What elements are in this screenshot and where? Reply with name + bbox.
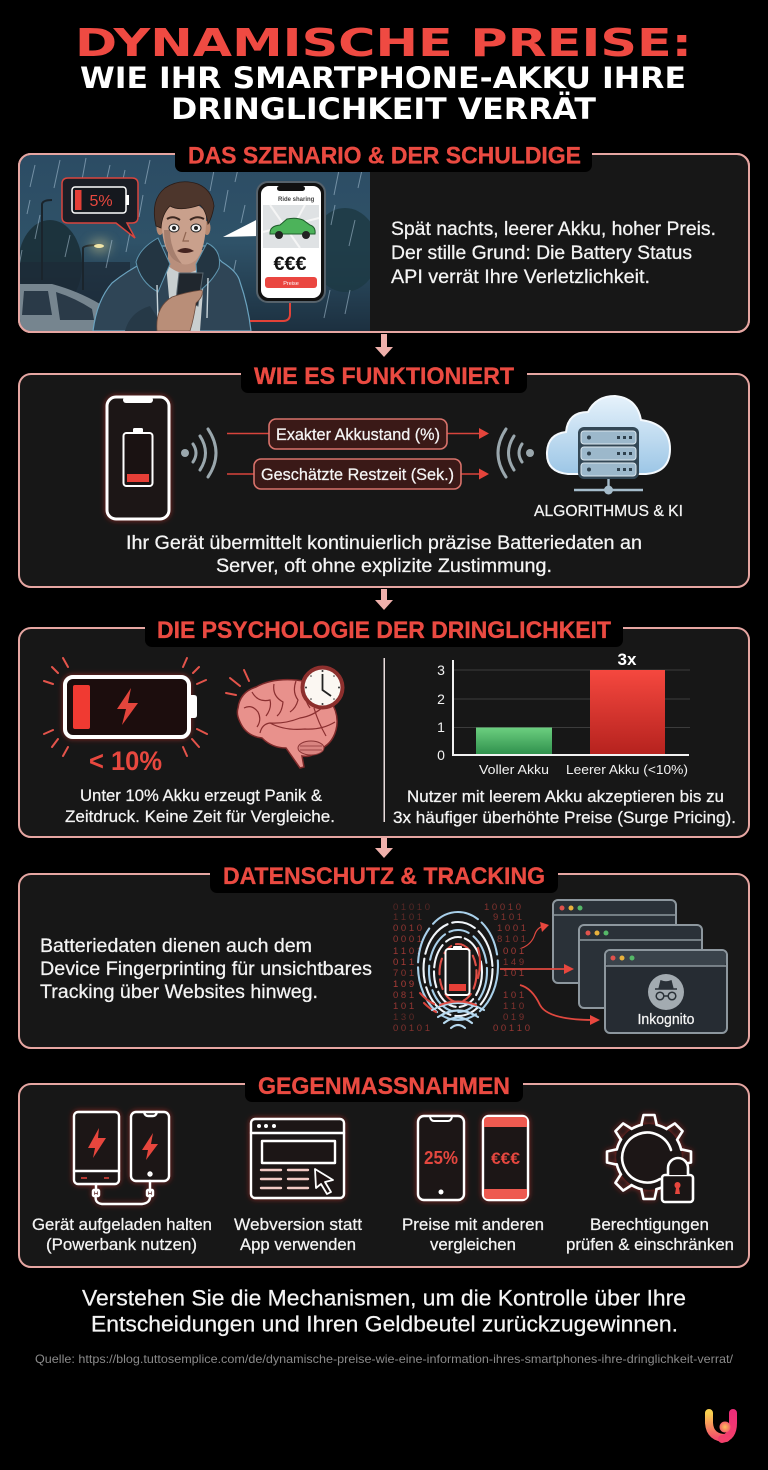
bar chart: Leerer Akku (<10%): [566, 762, 688, 777]
divider: [384, 658, 385, 822]
closing statement: Entscheidungen und Ihren Geldbeutel zurückzugewinnen.: [91, 1312, 678, 1336]
icon: signal waves from phone: [181, 429, 216, 477]
ride app phone: Ride sharing: [278, 197, 315, 203]
arrow: exact battery level: Exakter Akkustand (%): [276, 425, 440, 444]
logo: [709, 1413, 733, 1439]
labels: countermeasures: [32, 1216, 734, 1254]
binary code columns: 1 1 0 1: [393, 946, 422, 957]
binary code columns: 9 1 0 1: [493, 912, 522, 923]
icon: low battery with alarm rays: [44, 658, 207, 756]
icon: two phones comparing prices: €€€: [491, 1149, 521, 1168]
arrow: psychology to privacy: [375, 838, 393, 858]
battery speech bubble: [62, 178, 138, 238]
arrow: exact battery level: [227, 419, 489, 449]
text: panic: Zeitdruck. Keine Zeit für Vergleiche.: [65, 807, 335, 826]
labels: countermeasures: App verwenden: [240, 1236, 356, 1254]
heading: psychology: DIE PSYCHOLOGIE DER DRINGLICHKEIT: [157, 617, 611, 644]
heading: countermeasures: GEGENMASSNAHMEN: [258, 1073, 510, 1100]
hair: [154, 182, 214, 228]
panel: psychology: [19, 611, 749, 837]
illustration: man in rain with phone: [18, 155, 379, 331]
icon: power bank and phone: [74, 1112, 169, 1204]
binary code columns: 1 1 0 1: [393, 912, 422, 923]
icon: two phones comparing prices: [418, 1116, 528, 1200]
heading: how it works: WIE ES FUNKTIONIERT: [254, 363, 514, 390]
text: scenario: Spät nachts, leerer Akku, hoher Preis.: [391, 219, 716, 240]
binary code columns: 1 0 1: [503, 990, 524, 1001]
red cable: [250, 302, 290, 321]
text: surge pricing: [393, 787, 736, 827]
icon: browser with cursor: [251, 1119, 344, 1198]
panel: countermeasures: [19, 1067, 749, 1267]
text: scenario: Der stille Grund: Die Battery Status: [391, 243, 692, 264]
bar chart: 0: [437, 747, 445, 763]
binary code columns: 1 1 0: [503, 1001, 524, 1012]
heading: privacy: DATENSCHUTZ & TRACKING: [223, 863, 545, 890]
arrow: estimated remaining time: [227, 459, 489, 489]
binary code columns: 0 0 1: [503, 946, 524, 957]
title: [75, 21, 692, 126]
speech tail to app: [223, 220, 256, 237]
text: privacy: Batteriedaten dienen auch dem: [40, 936, 312, 957]
icon: signal waves to cloud: [498, 429, 534, 477]
icon: brain with clock: [226, 668, 342, 768]
car in background: [20, 284, 100, 331]
text: surge pricing: Nutzer mit leerem Akku akzeptieren bis zu: [407, 787, 724, 806]
closing statement: Verstehen Sie die Mechanismen, um die Kontrolle über Ihre: [82, 1286, 686, 1310]
head: [156, 224, 162, 235]
text: how it works: Server, oft ohne explizite Zustimmung.: [216, 556, 552, 577]
labels: countermeasures: prüfen & einschränken: [566, 1236, 734, 1254]
title: WIE IHR SMARTPHONE-AKKU IHRE: [80, 61, 686, 95]
arrow: scenario to function: [375, 334, 393, 357]
icon: cloud server: [547, 396, 670, 494]
handheld phone: [176, 273, 203, 306]
text: scenario: [391, 219, 716, 288]
binary code columns: 0 0 0 1: [393, 934, 422, 945]
ride app phone: [257, 182, 325, 302]
icon: gear with lock: [607, 1115, 693, 1202]
binary code columns: 0 1 1: [393, 957, 414, 968]
title: DRINGLICHKEIT VERRÄT: [171, 92, 596, 126]
text: surge pricing: 3x häufiger überhöhte Preise (Surge Pricing).: [393, 808, 736, 827]
bar chart: 3: [437, 662, 445, 678]
labels: countermeasures: Preise mit anderen: [402, 1216, 544, 1234]
closing statement: [82, 1286, 686, 1336]
panel: scenario: [18, 136, 749, 332]
labels: countermeasures: vergleichen: [430, 1236, 516, 1254]
labels: countermeasures: Berechtigungen: [590, 1216, 709, 1234]
text: privacy: Device Fingerprinting für unsichtbares: [40, 959, 372, 980]
battery speech bubble: 5%: [89, 193, 113, 210]
binary code columns: 7 0 1: [393, 968, 414, 979]
icon: fingerprint with battery: [418, 912, 498, 1028]
binary code columns: 0 1 9: [503, 1012, 524, 1023]
panel: how it works: [19, 357, 749, 587]
binary code columns: 0 0 1 0 1: [393, 1023, 430, 1034]
binary code columns: 1 3 0: [393, 1012, 414, 1023]
bar chart: 3x: [618, 650, 637, 669]
title: DYNAMISCHE PREISE:: [75, 21, 692, 66]
text: how it works: Ihr Gerät übermittelt kontinuierlich präzise Batteriedaten an: [126, 533, 642, 554]
binary code columns: 1 0 0 1 0: [484, 902, 521, 913]
binary code columns: 0 0 1 0: [393, 923, 422, 934]
icon: incognito: [648, 974, 684, 1010]
icon: two phones comparing prices: 25%: [424, 1148, 458, 1168]
text: privacy: [40, 936, 372, 1003]
text: panic: Unter 10% Akku erzeugt Panik &: [80, 786, 323, 805]
binary code columns: 1 0 1: [393, 1001, 414, 1012]
arrow: estimated remaining time: Geschätzte Restzeit (Sek.): [261, 465, 454, 484]
arrow: function to psychology: [375, 589, 393, 610]
binary code columns: 8 1 0 1: [497, 934, 526, 945]
panel: privacy: [19, 857, 749, 1048]
text: scenario: API verrät Ihre Verletzlichkeit.: [391, 267, 650, 288]
binary code columns: 1 0 1: [503, 968, 524, 979]
labels: countermeasures: Webversion statt: [234, 1216, 362, 1234]
heading: scenario: DAS SZENARIO & DER SCHULDIGE: [188, 142, 581, 170]
label: under 10 percent: < 10%: [89, 746, 162, 776]
bar chart: Voller Akku: [479, 762, 549, 777]
ride app phone: Preise: [283, 281, 299, 287]
icon: phone with low battery: [107, 397, 169, 519]
bar chart: 2: [437, 691, 445, 707]
binary code columns: 1 0 0 1: [497, 923, 526, 934]
labels: countermeasures: Gerät aufgeladen halten: [32, 1216, 212, 1234]
eyes and mouth: [169, 224, 179, 232]
binary code columns: [393, 902, 530, 1034]
arrows: tracking across sites: [500, 922, 600, 1025]
hoodie: [93, 246, 251, 331]
bar chart: 1: [437, 719, 445, 735]
text: how it works: [126, 533, 642, 577]
labels: countermeasures: (Powerbank nutzen): [46, 1236, 197, 1254]
binary code columns: 1 4 9: [503, 957, 524, 968]
binary code columns: 0 8 1: [393, 990, 414, 1001]
label: algorithm: ALGORITHMUS & KI: [534, 503, 683, 520]
text: privacy: Tracking über Websites hinweg.: [40, 982, 318, 1003]
text: panic: [65, 786, 335, 826]
bar chart: [437, 650, 690, 777]
binary code columns: 0 0 1 1 0: [493, 1023, 530, 1034]
binary code columns: 1 0 9: [393, 979, 414, 990]
label: incognito: Inkognito: [638, 1011, 694, 1028]
ride app phone: €€€: [274, 254, 307, 275]
browser windows: [553, 900, 727, 1033]
source line: Quelle: https://blog.tuttosemplice.com/de/dynamische-preise-wie-eine-information-ihres-smartphones-ihre-dringlichkeit-verrat/: [35, 1352, 734, 1366]
binary code columns: 0 1 0 1 0: [393, 902, 430, 913]
